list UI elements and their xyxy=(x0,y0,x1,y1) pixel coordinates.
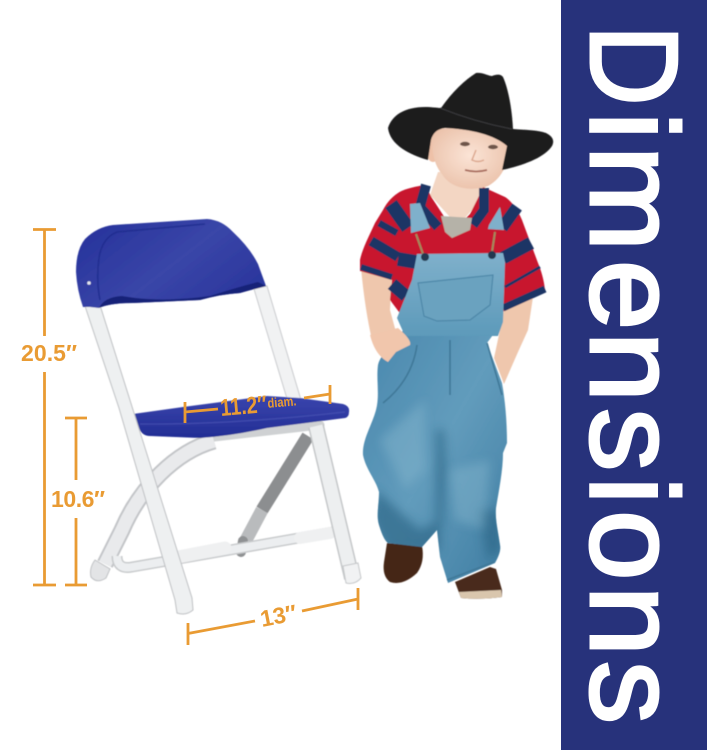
chair photo xyxy=(76,219,361,614)
boy: left shoe xyxy=(384,543,423,583)
chair: seat highlight xyxy=(140,412,345,424)
boy: right shoe sole xyxy=(459,590,502,599)
boy photo xyxy=(360,73,553,599)
panel: title band xyxy=(561,0,707,750)
chair: back rest xyxy=(76,219,266,308)
boy: bib buttons xyxy=(421,251,496,261)
boy: right ear xyxy=(502,149,512,167)
dimension lines and labels xyxy=(21,230,358,645)
chair: rear legs and cross tube xyxy=(105,425,333,568)
boy: ears xyxy=(426,138,440,162)
boy: right strap xyxy=(488,207,504,230)
boy: cowboy hat xyxy=(388,73,553,170)
chair: back rest moulding xyxy=(98,224,205,300)
dimension: 20.5 inch height xyxy=(33,230,56,585)
boy: left hand xyxy=(370,328,410,362)
chair: right upright post xyxy=(254,286,301,402)
boy: pocket seams xyxy=(383,340,502,580)
label: 11.2 inch diam: diam. xyxy=(267,393,297,411)
label: 11.2 inch diam: 11.2″ xyxy=(219,390,268,421)
boy: left arm xyxy=(361,268,396,340)
chair: rivet xyxy=(87,281,91,285)
dimension: 11.2 inch seat diameter xyxy=(185,385,330,423)
chair: rear foot xyxy=(90,560,110,581)
boy: overalls bib xyxy=(397,253,505,336)
boy: eyes and mouth xyxy=(460,142,498,172)
chair: left upright post and front leg xyxy=(85,302,193,614)
chair: seat xyxy=(133,396,349,438)
label: 13 inch: 13″ xyxy=(258,599,299,632)
boy: hat band highlight xyxy=(440,108,512,129)
boy: pants shading xyxy=(372,400,502,560)
heading: D of Dimensions: D xyxy=(564,25,702,106)
boy: neck xyxy=(430,172,487,226)
boy: strap buckles xyxy=(416,232,495,254)
boy: face xyxy=(432,128,508,189)
boy: shirt navy stripes xyxy=(361,185,545,308)
label: 20.5 inch: 20.5″ xyxy=(21,340,77,366)
boy: right arm xyxy=(494,297,533,384)
boy: pants xyxy=(363,328,507,583)
boy: bib pocket xyxy=(418,275,493,321)
chair: right front leg xyxy=(316,426,352,578)
boy: right shoe xyxy=(455,567,502,599)
dimension: 10.6 inch seat height xyxy=(65,418,87,585)
dimension: 13 inch width xyxy=(188,588,358,645)
boy: shirt placket xyxy=(441,216,472,238)
label: 10.6 inch: 10.6″ xyxy=(51,486,105,512)
boy: overall straps xyxy=(410,203,430,233)
chair: right foot xyxy=(343,563,361,583)
boy: shirt xyxy=(360,185,545,316)
chair: back rest shadow xyxy=(99,282,266,308)
heading: imensions of Dimensions: imensions xyxy=(564,112,704,724)
